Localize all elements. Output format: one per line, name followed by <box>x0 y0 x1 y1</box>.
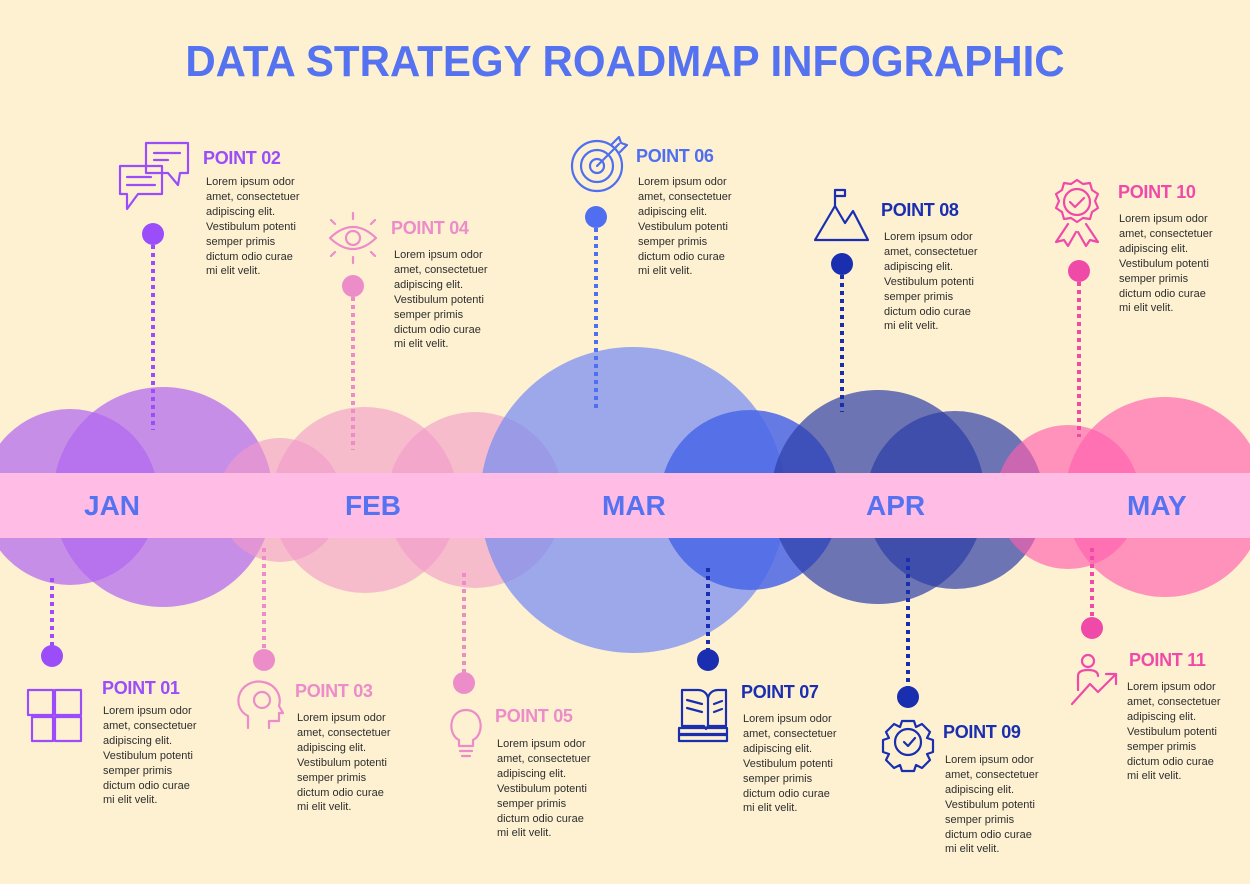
point 02: POINT 02 <box>203 148 281 168</box>
point 11: mi elit velit. <box>1127 770 1181 782</box>
point 01: mi elit velit. <box>103 794 157 806</box>
point 03: Vestibulum potenti <box>297 757 387 769</box>
point 09: amet, consectetuer <box>945 769 1039 781</box>
point 06: Vestibulum potenti <box>638 221 728 233</box>
point 01 <box>102 678 197 806</box>
point 06: dictum odio curae <box>638 251 725 263</box>
point 03: dictum odio curae <box>297 787 384 799</box>
point 07: dictum odio curae <box>743 788 830 800</box>
circles: jan <box>0 387 273 607</box>
dots <box>41 206 1103 708</box>
point 06: amet, consectetuer <box>638 191 732 203</box>
point 10: dictum odio curae <box>1119 288 1206 300</box>
point 06: mi elit velit. <box>638 265 692 277</box>
icon: person chart <box>1072 655 1116 704</box>
point 08: POINT 08 <box>881 200 959 220</box>
point 02: semper primis <box>206 236 275 248</box>
point 01: POINT 01 <box>102 678 180 698</box>
point 04: Vestibulum potenti <box>394 294 484 306</box>
icon: chat <box>120 143 188 209</box>
point 07 <box>741 682 837 814</box>
point 03: semper primis <box>297 772 366 784</box>
month labels: MAR <box>602 490 666 521</box>
point 05: POINT 05 <box>495 706 573 726</box>
point 11: dictum odio curae <box>1127 756 1214 768</box>
icon: puzzle <box>28 690 81 741</box>
point 04: POINT 04 <box>391 218 469 238</box>
point 09: Lorem ipsum odor <box>945 754 1034 766</box>
point 11: POINT 11 <box>1129 650 1206 670</box>
circle: mar <box>480 347 786 653</box>
point 04: semper primis <box>394 309 463 321</box>
point 11: semper primis <box>1127 741 1196 753</box>
circles: may <box>996 397 1250 597</box>
month labels: MAY <box>1127 490 1187 521</box>
point 07: amet, consectetuer <box>743 728 837 740</box>
point 06: Lorem ipsum odor <box>638 176 727 188</box>
icon: badge <box>1056 180 1098 246</box>
point 08: Vestibulum potenti <box>884 276 974 288</box>
point 07: Vestibulum potenti <box>743 758 833 770</box>
point 09 <box>943 722 1039 855</box>
point 07: Lorem ipsum odor <box>743 713 832 725</box>
point 07: POINT 07 <box>741 682 819 702</box>
point 01: dictum odio curae <box>103 780 190 792</box>
point 06: adipiscing elit. <box>638 206 707 218</box>
point 03: POINT 03 <box>295 681 373 701</box>
point 07: mi elit velit. <box>743 802 797 814</box>
point 01: adipiscing elit. <box>103 735 172 747</box>
point 10: POINT 10 <box>1118 182 1196 202</box>
icon: target <box>572 137 627 191</box>
point 02: amet, consectetuer <box>206 191 300 203</box>
point 09: semper primis <box>945 814 1014 826</box>
point 04: Lorem ipsum odor <box>394 249 483 261</box>
point 08: Lorem ipsum odor <box>884 231 973 243</box>
point 08: dictum odio curae <box>884 306 971 318</box>
point 01: Lorem ipsum odor <box>103 705 192 717</box>
point 11 <box>1127 650 1221 782</box>
point 02: adipiscing elit. <box>206 206 275 218</box>
point 02: mi elit velit. <box>206 265 260 277</box>
point 11: amet, consectetuer <box>1127 696 1221 708</box>
connectors <box>52 228 1092 692</box>
point 03: adipiscing elit. <box>297 742 366 754</box>
point 06: semper primis <box>638 236 707 248</box>
point 11: adipiscing elit. <box>1127 711 1196 723</box>
point 03: mi elit velit. <box>297 801 351 813</box>
icon: book <box>679 690 727 741</box>
circles: apr <box>660 390 1044 604</box>
point 08: adipiscing elit. <box>884 261 953 273</box>
point 06: POINT 06 <box>636 146 714 166</box>
point 02 <box>203 148 300 277</box>
point 10: adipiscing elit. <box>1119 243 1188 255</box>
point 10: mi elit velit. <box>1119 302 1173 314</box>
icon: eye <box>330 213 376 263</box>
point 08: mi elit velit. <box>884 320 938 332</box>
point 04 <box>391 218 488 350</box>
point 08 <box>881 200 978 332</box>
point 10: Vestibulum potenti <box>1119 258 1209 270</box>
point 03: Lorem ipsum odor <box>297 712 386 724</box>
point 05 <box>495 706 591 839</box>
point 07: adipiscing elit. <box>743 743 812 755</box>
icon: bulb <box>451 710 481 756</box>
month labels: FEB <box>345 490 401 521</box>
point 01: amet, consectetuer <box>103 720 197 732</box>
point 10: Lorem ipsum odor <box>1119 213 1208 225</box>
icon: head <box>238 682 283 728</box>
icon: mountain <box>815 190 868 240</box>
point 05: Lorem ipsum odor <box>497 738 586 750</box>
point 05: Vestibulum potenti <box>497 783 587 795</box>
point 10 <box>1118 182 1213 314</box>
point 09: Vestibulum potenti <box>945 799 1035 811</box>
point 05: dictum odio curae <box>497 813 584 825</box>
point 09: dictum odio curae <box>945 829 1032 841</box>
point 06 <box>636 146 732 277</box>
point 02: Lorem ipsum odor <box>206 176 295 188</box>
point 09: mi elit velit. <box>945 843 999 855</box>
point 03: amet, consectetuer <box>297 727 391 739</box>
point 07: semper primis <box>743 773 812 785</box>
point 10: semper primis <box>1119 273 1188 285</box>
month band <box>0 473 1250 538</box>
point 11: Lorem ipsum odor <box>1127 681 1216 693</box>
point 09: POINT 09 <box>943 722 1021 742</box>
title: DATA STRATEGY ROADMAP INFOGRAPHIC <box>185 37 1065 86</box>
point 05: amet, consectetuer <box>497 753 591 765</box>
point 01: semper primis <box>103 765 172 777</box>
point 03 <box>295 681 391 813</box>
icons <box>28 137 1116 771</box>
point 02: Vestibulum potenti <box>206 221 296 233</box>
point 01: Vestibulum potenti <box>103 750 193 762</box>
point 09: adipiscing elit. <box>945 784 1014 796</box>
point 05: adipiscing elit. <box>497 768 566 780</box>
point 11: Vestibulum potenti <box>1127 726 1217 738</box>
point 04: amet, consectetuer <box>394 264 488 276</box>
point 04: adipiscing elit. <box>394 279 463 291</box>
icon: gear <box>883 721 933 771</box>
point 02: dictum odio curae <box>206 251 293 263</box>
point 05: semper primis <box>497 798 566 810</box>
point 04: dictum odio curae <box>394 324 481 336</box>
point 05: mi elit velit. <box>497 827 551 839</box>
point 08: amet, consectetuer <box>884 246 978 258</box>
circles: feb <box>218 407 563 593</box>
point 04: mi elit velit. <box>394 338 448 350</box>
point 08: semper primis <box>884 291 953 303</box>
month labels: APR <box>866 490 925 521</box>
point 10: amet, consectetuer <box>1119 228 1213 240</box>
month labels: JAN <box>84 490 140 521</box>
